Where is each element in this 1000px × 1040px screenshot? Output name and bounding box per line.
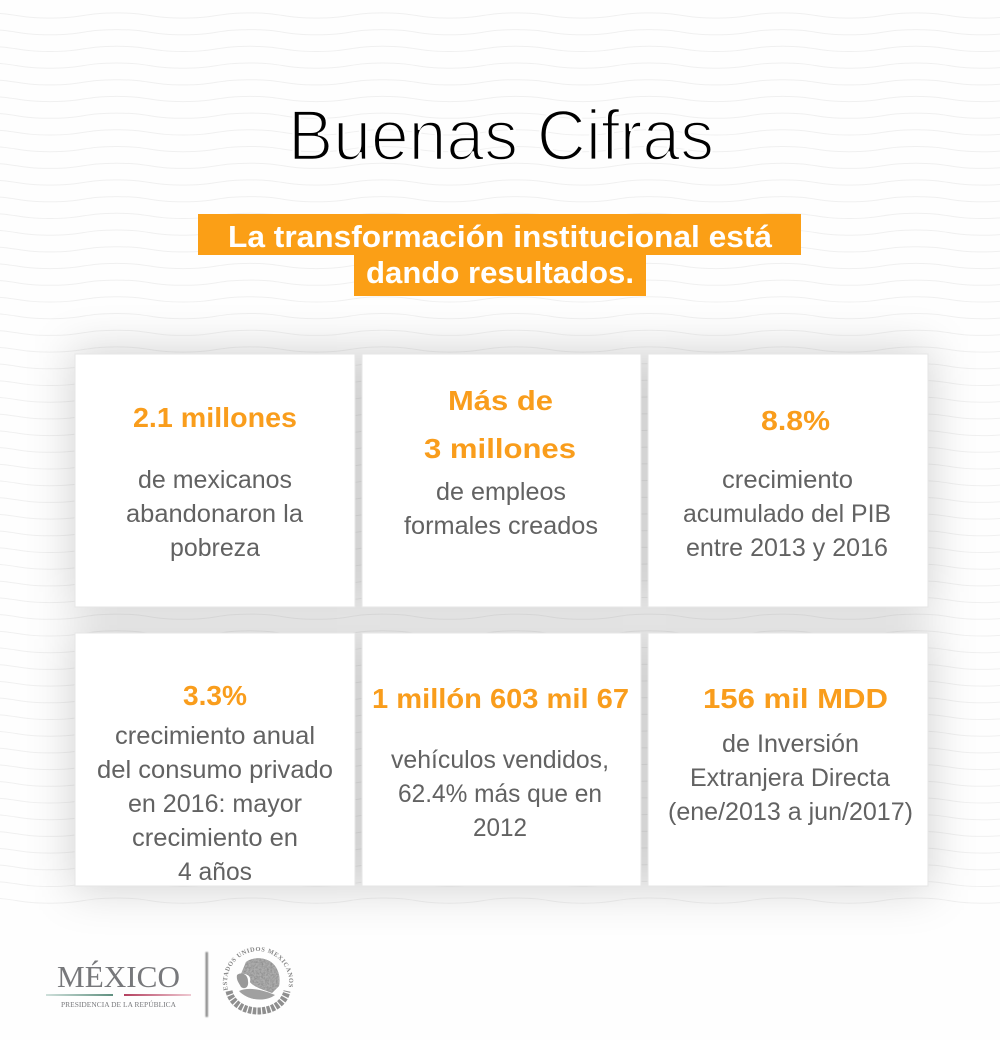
panel: 1 millón 603 mil 67: 2012 — [473, 814, 527, 842]
logo: México Presidencia de la República: PRESIDENCIA DE LA REPÚBLICA — [61, 999, 177, 1009]
panel: 3.3%: 3.3% — [183, 680, 247, 711]
panel: 156 mil MDD: (ene/2013 a jun/2017) — [668, 798, 913, 826]
panel: 3.3%: 4 años — [178, 858, 252, 886]
panel: 156 mil MDD: Extranjera Directa — [690, 764, 890, 792]
panel: 2.1 millones — [75, 354, 355, 607]
panel: 3 millones — [362, 354, 641, 607]
panel: 8.8% — [648, 354, 928, 607]
panel: 2.1 millones: pobreza — [170, 534, 260, 562]
icon: national seal — [222, 947, 294, 1014]
panel: 1 millón 603 mil 67: 62.4% más que en — [398, 780, 602, 808]
panel: 8.8%: crecimiento — [722, 466, 853, 494]
subtitle banner — [198, 214, 801, 296]
panel: 3 millones: formales creados — [404, 512, 598, 540]
panel: 8.8%: entre 2013 y 2016 — [686, 534, 888, 562]
panel: 156 mil MDD: 156 mil MDD — [703, 683, 888, 714]
panel: 156 mil MDD: de Inversión — [722, 730, 859, 758]
panel: 3.3%: en 2016: mayor — [128, 790, 302, 818]
panel: 3.3% — [75, 633, 355, 886]
panel: 3.3%: del consumo privado — [97, 756, 333, 784]
panel: 1 millón 603 mil 67 — [362, 633, 641, 886]
panel: 3.3%: crecimiento anual — [115, 722, 315, 750]
panel: 8.8%: 8.8% — [761, 405, 830, 436]
panel: 1 millón 603 mil 67: 1 millón 603 mil 67 — [372, 683, 629, 714]
title: Buenas Cifras — [288, 97, 714, 176]
icon: national seal: ESTADOS UNIDOS MEXICANOS — [222, 947, 294, 991]
logo: México Presidencia de la República: MÉXICO — [57, 959, 180, 994]
panel: 3 millones: 3 millones — [424, 433, 576, 464]
logo: México Presidencia de la República — [46, 959, 191, 1009]
panel: 2.1 millones: 2.1 millones — [133, 402, 297, 433]
panel: 3 millones: Más de — [448, 385, 553, 416]
panel: 156 mil MDD — [648, 633, 928, 886]
panel: 1 millón 603 mil 67: vehículos vendidos, — [391, 746, 609, 774]
panel: 3 millones: de empleos — [436, 478, 566, 506]
panel: 8.8%: acumulado del PIB — [683, 500, 891, 528]
panel: 2.1 millones: abandonaron la — [126, 500, 303, 528]
card shadows — [72, 350, 931, 890]
subtitle banner: La transformación institucional está — [228, 219, 773, 254]
divider — [206, 952, 208, 1017]
subtitle banner: dando resultados. — [366, 255, 634, 290]
panel: 3.3%: crecimiento en — [132, 824, 298, 852]
panel: 2.1 millones: de mexicanos — [138, 466, 292, 494]
